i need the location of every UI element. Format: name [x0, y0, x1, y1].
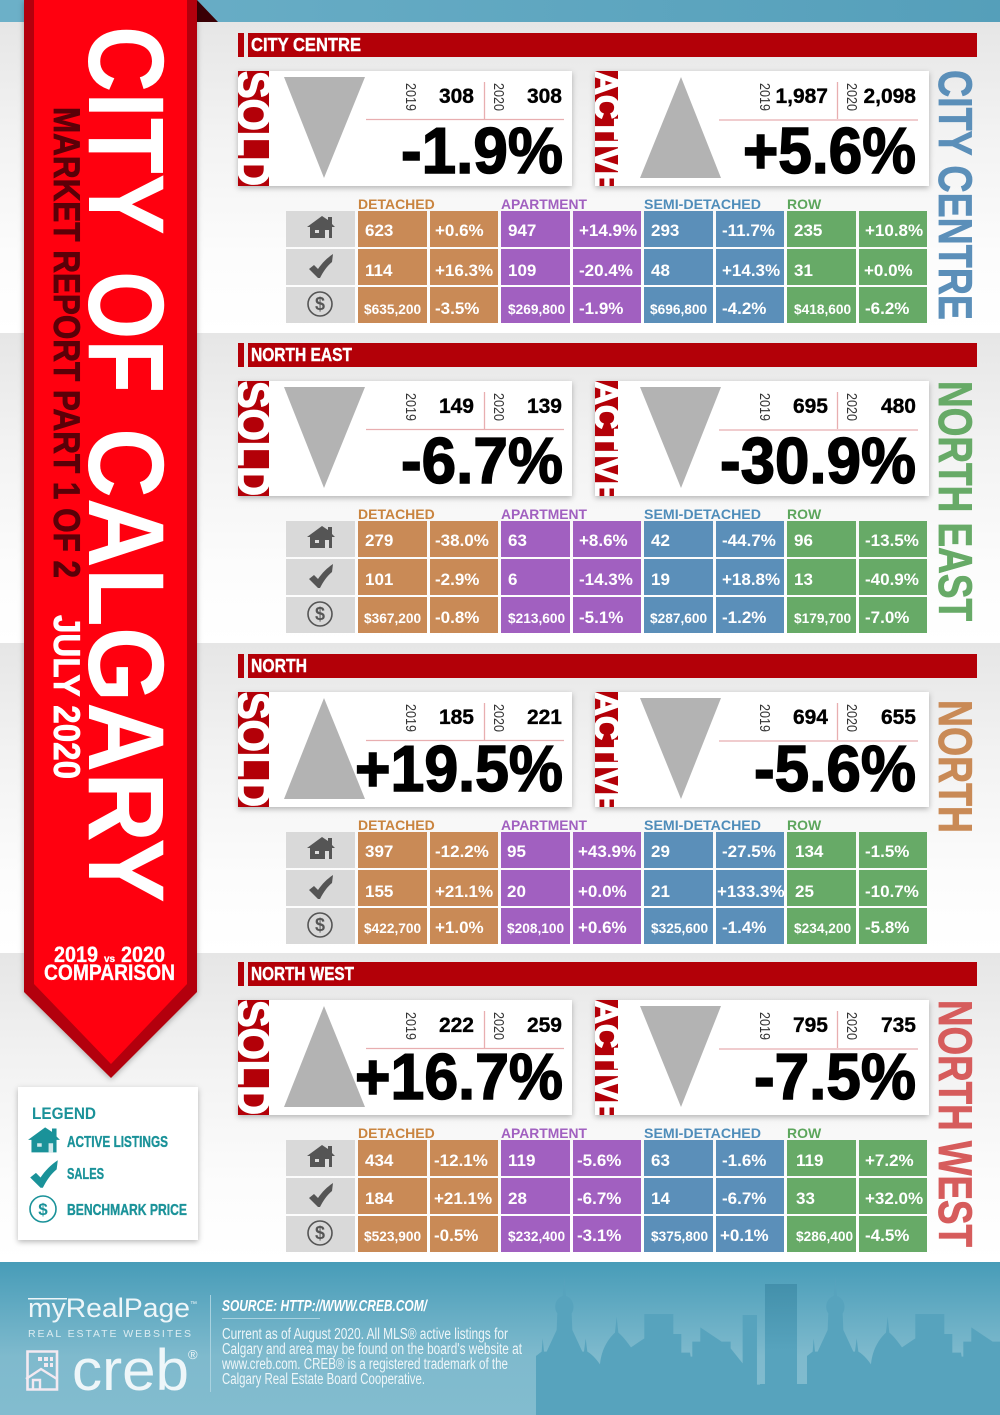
data table: -1.2% [722, 608, 766, 627]
card: sold [228, 692, 572, 807]
section header: NORTH WEST [251, 964, 354, 984]
data table: 31 [794, 261, 813, 280]
card: active: 2019 [756, 83, 773, 111]
data table: 96 [794, 531, 813, 550]
card: active: 2020 [843, 393, 860, 421]
data table: $ [315, 294, 325, 314]
ribbon title: CITY [66, 26, 187, 235]
data table: -1.5% [865, 842, 909, 861]
top teal bar [0, 0, 1000, 22]
card: sold: 308 [439, 85, 474, 108]
footer divider [210, 1295, 211, 1392]
logo: myRealPage [28, 1293, 197, 1340]
section header: CITY CENTRE [251, 35, 361, 55]
data table: -40.9% [865, 570, 919, 589]
data table: -44.7% [722, 531, 776, 550]
data table: $ [315, 604, 325, 624]
data table: 279 [365, 531, 393, 550]
data table: 95 [507, 842, 526, 861]
ribbon subtitle: MARKET REPORT PART 1 OF 2 [46, 107, 87, 578]
data table: SEMI-DETACHED [644, 1125, 761, 1141]
data table: 119 [796, 1151, 823, 1170]
section: north west [228, 962, 982, 1252]
data table: $367,200 [364, 611, 421, 626]
card: sold: 2020 [490, 704, 507, 732]
data table: $208,100 [507, 921, 564, 936]
data table: -6.2% [865, 299, 909, 318]
data table: $418,600 [794, 302, 851, 317]
data table: -1.9% [579, 299, 623, 318]
card: active: 655 [881, 706, 916, 729]
data table: +21.1% [434, 1189, 492, 1208]
data table: $375,800 [651, 1229, 708, 1244]
legend heading: LEGEND [32, 1104, 96, 1123]
section: north [228, 654, 982, 944]
card: sold: 2019 [402, 704, 419, 732]
data table: +0.0% [578, 882, 627, 901]
card: active: -5.6% [754, 732, 916, 805]
card: sold: -6.7% [401, 424, 563, 497]
data table: $213,600 [508, 611, 565, 626]
section: north east [228, 343, 982, 633]
card: sold: 2020 [490, 1012, 507, 1040]
section: city centre [228, 33, 982, 323]
card: sold: 2019 [402, 83, 419, 111]
comparison label: COMPARISON [44, 960, 175, 985]
data table: 119 [508, 1151, 535, 1170]
data table: -4.5% [865, 1226, 909, 1245]
logo: creb: creb [72, 1338, 189, 1403]
data table: -5.6% [577, 1151, 621, 1170]
data table: 134 [795, 842, 824, 861]
legend label: benchmark price: BENCHMARK PRICE [67, 1202, 187, 1219]
skyline [536, 1277, 1000, 1415]
side label: NORTH WEST [929, 1000, 982, 1247]
card: active [587, 692, 929, 814]
data table: ROW [787, 196, 822, 212]
card: active: 2019 [756, 393, 773, 421]
disclaimer text: www.creb.com. CREB® is a registered trademark of the [221, 1356, 508, 1373]
data table: -3.5% [435, 299, 479, 318]
data table: $325,600 [651, 921, 708, 936]
data table: $286,400 [796, 1229, 853, 1244]
data table: -5.8% [865, 918, 909, 937]
logo: creb [26, 1338, 198, 1403]
card: active: 480 [881, 395, 916, 418]
card: active: 695 [793, 395, 828, 418]
data table: DETACHED [358, 1125, 435, 1141]
card: active: 694 [793, 706, 828, 729]
logo: creb: ® [188, 1347, 198, 1362]
data table: $523,900 [364, 1229, 421, 1244]
card: active: 2019 [756, 1012, 773, 1040]
card: active: 2020 [843, 83, 860, 111]
data table: 6 [508, 570, 517, 589]
data table: $696,800 [650, 302, 707, 317]
data table: -5.1% [579, 608, 623, 627]
data table [286, 506, 927, 633]
data table: +133.3% [717, 882, 785, 901]
data table: +14.9% [579, 221, 637, 240]
card: sold [228, 71, 572, 187]
data table: 184 [365, 1189, 394, 1208]
data table: +0.0% [864, 261, 913, 280]
data table: -6.7% [722, 1189, 766, 1208]
disclaimer text: Calgary and area may be found on the board's website at [222, 1341, 523, 1358]
data table: 155 [365, 882, 393, 901]
data table: 28 [508, 1189, 527, 1208]
data table: $179,700 [794, 611, 851, 626]
icon: benchmark price [30, 1196, 56, 1222]
card: active: -30.9% [720, 424, 916, 497]
data table: -0.5% [434, 1226, 478, 1245]
data table: 63 [508, 531, 527, 550]
data table: $232,400 [508, 1229, 565, 1244]
data table: 114 [365, 261, 393, 280]
data table: 235 [794, 221, 822, 240]
card: active [587, 381, 929, 503]
card: sold: 185 [439, 706, 474, 729]
data table: ROW [787, 1125, 822, 1141]
data table: $ [315, 915, 325, 935]
data table: -4.2% [722, 299, 766, 318]
data table: +1.0% [435, 918, 484, 937]
data table: +0.6% [435, 221, 484, 240]
data table: -6.7% [577, 1189, 621, 1208]
disclaimer text: Current as of August 2020. All MLS® active listings for [222, 1326, 508, 1343]
section header [238, 33, 977, 57]
data table: 623 [365, 221, 393, 240]
footer [0, 1262, 1000, 1415]
side label: NORTH EAST [929, 381, 982, 621]
card: sold [228, 1000, 572, 1115]
data table: DETACHED [358, 506, 435, 522]
ribbon date: JULY 2020 [46, 615, 87, 779]
disclaimer text: Calgary Real Estate Board Cooperative. [222, 1371, 425, 1388]
card: active: ACTIVE [587, 381, 625, 503]
data table: +18.8% [722, 570, 780, 589]
data table: -1.4% [722, 918, 766, 937]
data table: +0.6% [578, 918, 627, 937]
data table: +7.2% [865, 1151, 914, 1170]
ribbon banner [24, 0, 218, 1078]
data table: 947 [508, 221, 536, 240]
data table: +43.9% [578, 842, 636, 861]
data table: 33 [796, 1189, 815, 1208]
legend panel [18, 1087, 198, 1240]
section header: NORTH EAST [251, 345, 352, 365]
data table: -7.0% [865, 608, 909, 627]
comparison label: vs [104, 954, 116, 965]
data table: 25 [795, 882, 814, 901]
data table: APARTMENT [501, 506, 587, 522]
data table: +0.1% [720, 1226, 769, 1245]
data table: +14.3% [722, 261, 780, 280]
data table: APARTMENT [501, 1125, 587, 1141]
legend label: active listings: ACTIVE LISTINGS [67, 1134, 168, 1151]
data table: 397 [365, 842, 393, 861]
section header: NORTH [251, 656, 307, 676]
data table: -1.6% [722, 1151, 766, 1170]
card: active: 2,098 [863, 85, 916, 108]
data table: +10.8% [865, 221, 923, 240]
card: active: +5.6% [743, 114, 916, 187]
data table: 48 [651, 261, 670, 280]
card: sold: 308 [527, 85, 562, 108]
data table: +32.0% [865, 1189, 923, 1208]
data table: -38.0% [435, 531, 489, 550]
data table: -0.8% [435, 608, 479, 627]
data table: 14 [651, 1189, 670, 1208]
data table: -12.1% [434, 1151, 488, 1170]
card: active: 2020 [843, 1012, 860, 1040]
data table: $234,200 [794, 921, 851, 936]
card: sold: 259 [527, 1014, 562, 1037]
side label: NORTH [929, 700, 982, 833]
comparison label: 2020 [121, 942, 165, 967]
card: active [587, 71, 929, 193]
data table: DETACHED [358, 196, 435, 212]
data table [286, 1125, 927, 1252]
card: active: 795 [793, 1014, 828, 1037]
comparison label [44, 942, 175, 985]
card: active: ACTIVE [587, 1000, 625, 1122]
data table: -13.5% [865, 531, 919, 550]
card: sold: SOLD [228, 381, 279, 496]
card: sold: 139 [527, 395, 562, 418]
logo: myRealPage: REAL ESTATE WEBSITES [28, 1328, 191, 1340]
source line: SOURCE: HTTP://WWW.CREB.COM/ [222, 1298, 428, 1315]
data table: ROW [787, 506, 822, 522]
icon: sales [30, 1160, 58, 1188]
data table [286, 817, 927, 944]
data table: -11.7% [722, 221, 775, 240]
card: sold [228, 381, 572, 497]
data table: SEMI-DETACHED [644, 506, 761, 522]
card: active: 2019 [756, 704, 773, 732]
data table: $422,700 [364, 921, 421, 936]
data table: -27.5% [722, 842, 776, 861]
data table: DETACHED [358, 817, 435, 833]
card: sold: SOLD [228, 71, 279, 186]
data table: 21 [651, 882, 670, 901]
data table: -14.3% [579, 570, 633, 589]
logo: myRealPage: myRealPage [28, 1293, 190, 1323]
logo: myRealPage: ™ [190, 1301, 197, 1308]
data table: 19 [651, 570, 670, 589]
ribbon title: OF [66, 271, 187, 393]
card: sold: SOLD [228, 1000, 279, 1115]
data table [286, 196, 927, 323]
data table: 109 [508, 261, 536, 280]
data table: ROW [787, 817, 822, 833]
card: active: ACTIVE [587, 692, 625, 814]
card: sold: 2020 [490, 83, 507, 111]
card: sold: 2020 [490, 393, 507, 421]
card: active: -7.5% [754, 1040, 916, 1113]
card: sold: 222 [439, 1014, 474, 1037]
data table: APARTMENT [501, 817, 587, 833]
data table: +8.6% [579, 531, 628, 550]
data table: -20.4% [579, 261, 633, 280]
data table: 434 [365, 1151, 394, 1170]
section header [238, 343, 977, 367]
icon: active listings [28, 1127, 60, 1152]
card: sold: 221 [527, 706, 562, 729]
data table: SEMI-DETACHED [644, 817, 761, 833]
card: active [587, 1000, 929, 1122]
data table: -3.1% [577, 1226, 621, 1245]
disclaimer text [221, 1326, 523, 1388]
section header [238, 654, 977, 678]
side label: CITY CENTRE [929, 70, 982, 320]
card: sold: 2019 [402, 1012, 419, 1040]
card: active: ACTIVE [587, 71, 625, 193]
card: sold: 2019 [402, 393, 419, 421]
card: sold: 149 [439, 395, 474, 418]
data table: +16.3% [435, 261, 493, 280]
data table: 20 [507, 882, 526, 901]
data table: 101 [365, 570, 393, 589]
data table: SEMI-DETACHED [644, 196, 761, 212]
icon: benchmark price: $ [38, 1200, 48, 1219]
data table: $635,200 [364, 302, 421, 317]
data table: $ [315, 1223, 325, 1243]
card: active: 2020 [843, 704, 860, 732]
data table: $269,800 [508, 302, 565, 317]
data table: -2.9% [435, 570, 479, 589]
data table: +21.1% [435, 882, 493, 901]
data table: -12.2% [435, 842, 489, 861]
data table: 29 [651, 842, 670, 861]
card: active: 1,987 [775, 85, 828, 108]
data table: APARTMENT [501, 196, 587, 212]
card: sold: -1.9% [401, 114, 563, 187]
ribbon title: CALGARY [66, 428, 187, 903]
data table: 63 [651, 1151, 670, 1170]
ribbon title [66, 26, 187, 903]
card: sold: +19.5% [355, 732, 563, 805]
card: sold: SOLD [228, 692, 279, 807]
legend label: sales: SALES [67, 1166, 104, 1183]
data table: 42 [651, 531, 670, 550]
data table: $287,600 [650, 611, 707, 626]
card: sold: +16.7% [355, 1040, 563, 1113]
data table: 293 [651, 221, 679, 240]
data table: 13 [794, 570, 813, 589]
comparison label: 2019 [54, 942, 98, 967]
card: active: 735 [881, 1014, 916, 1037]
section header [238, 962, 977, 986]
data table: -10.7% [865, 882, 919, 901]
